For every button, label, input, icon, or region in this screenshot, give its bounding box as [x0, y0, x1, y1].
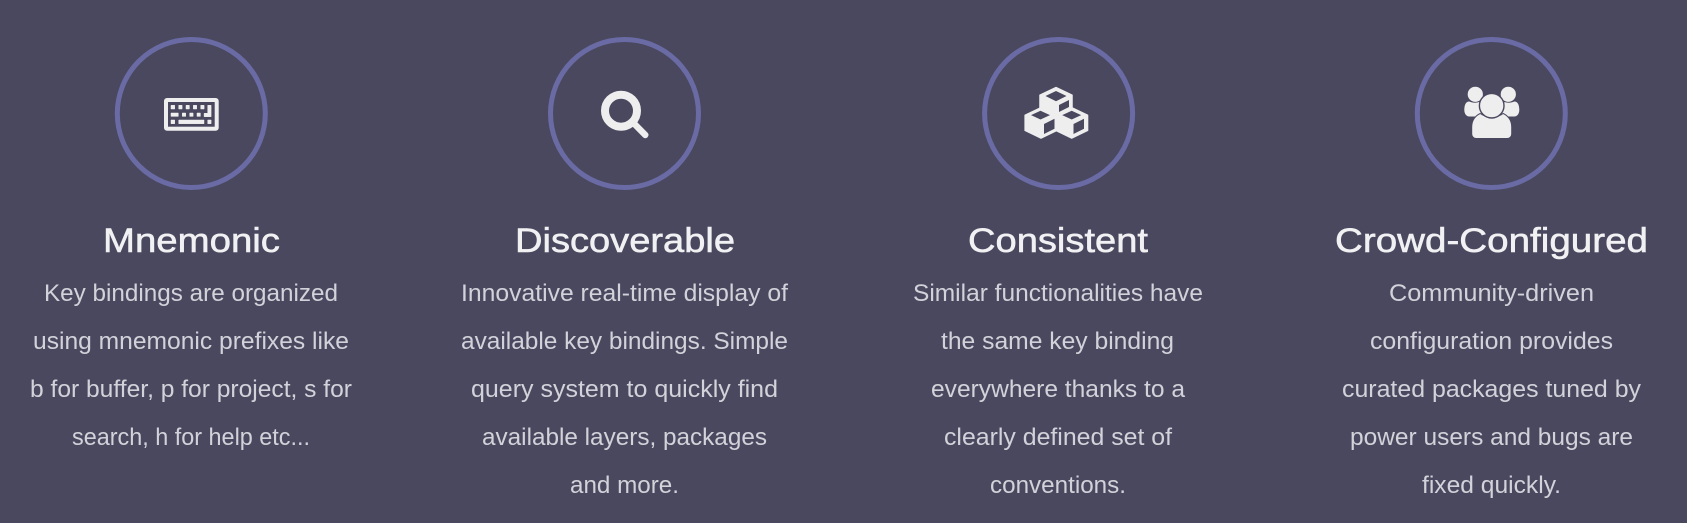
icon: stacked cubes in ring	[985, 40, 1133, 188]
description: Consistent: the same key binding	[941, 328, 1174, 355]
description: Crowd-Configured: fixed quickly.	[1422, 472, 1561, 499]
description: Consistent	[913, 280, 1203, 499]
description: Consistent: everywhere thanks to a	[931, 376, 1186, 403]
heading: Discoverable: Discoverable	[515, 222, 735, 260]
description: Consistent: conventions.	[990, 472, 1126, 499]
description: Crowd-Configured: configuration provides	[1370, 328, 1613, 355]
description: Discoverable: available layers, packages	[482, 424, 767, 451]
description: Discoverable: and more.	[570, 472, 679, 499]
description: Mnemonic: using mnemonic prefixes like	[33, 328, 349, 355]
description: Mnemonic: Key bindings are organized	[44, 280, 338, 307]
description: Discoverable: available key bindings. Simple	[461, 328, 788, 355]
icon: magnifying glass in ring	[550, 40, 698, 188]
description: Discoverable: query system to quickly find	[471, 376, 778, 403]
description: Discoverable	[461, 280, 788, 499]
icon: group of people in ring	[1417, 40, 1565, 188]
description: Consistent: clearly defined set of	[944, 424, 1172, 451]
icon: keyboard in ring	[117, 40, 265, 188]
panel: Consistent	[913, 40, 1203, 499]
panel: Crowd-Configured	[1335, 40, 1648, 499]
panel: Mnemonic	[30, 40, 352, 451]
description: Crowd-Configured	[1342, 280, 1641, 499]
description: Mnemonic: b for buffer, p for project, s for	[30, 376, 352, 403]
description: Mnemonic: search, h for help etc...	[72, 424, 310, 451]
description: Crowd-Configured: Community-driven	[1389, 280, 1594, 307]
heading: Crowd-Configured: Crowd-Configured	[1335, 222, 1648, 260]
description: Crowd-Configured: power users and bugs are	[1350, 424, 1633, 451]
heading: Mnemonic: Mnemonic	[103, 222, 280, 260]
description: Consistent: Similar functionalities have	[913, 280, 1203, 307]
description: Mnemonic	[30, 280, 352, 451]
heading: Consistent: Consistent	[968, 222, 1149, 260]
panel: Discoverable	[461, 40, 788, 499]
description: Discoverable: Innovative real-time display of	[461, 280, 788, 307]
description: Crowd-Configured: curated packages tuned by	[1342, 376, 1641, 403]
